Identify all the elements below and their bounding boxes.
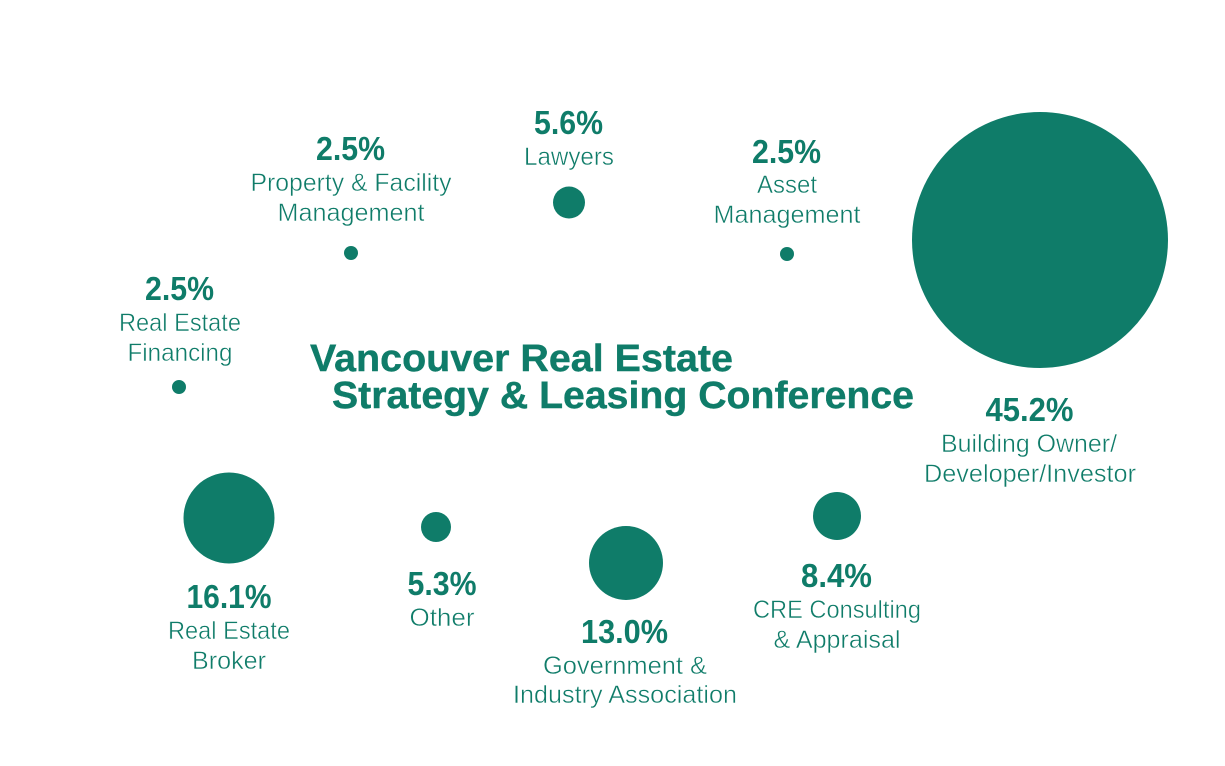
bubble: lawyers: Lawyers (524, 143, 614, 171)
bubble: real estate broker: 16.1% (186, 578, 272, 615)
bubble: cre consulting and appraisal: CRE Consulting (753, 596, 921, 624)
bubble: property and facility management: 2.5% (316, 130, 385, 167)
title: Vancouver Real Estate (310, 338, 733, 380)
bubble: government and industry association (513, 526, 737, 709)
bubble: building owner developer investor (912, 112, 1168, 488)
bubble: property and facility management: Management (278, 199, 425, 227)
bubble: real estate broker: Real Estate (168, 617, 290, 645)
bubble: cre consulting and appraisal (753, 492, 921, 654)
bubble: government and industry association: Government & (543, 652, 707, 680)
bubble: real estate financing: 2.5% (145, 270, 214, 307)
bubble: cre consulting and appraisal: & Appraisal (774, 626, 900, 654)
title (310, 338, 914, 417)
bubble: asset management: Management (714, 201, 861, 229)
bubble: other: Other (410, 604, 474, 632)
bubble: cre consulting and appraisal: 8.4% (801, 557, 872, 594)
bubble: lawyers: 5.6% (534, 104, 603, 141)
bubble: real estate broker: Broker (192, 647, 266, 675)
bubble: asset management: 2.5% (752, 133, 821, 170)
bubble: other: 5.3% (408, 565, 476, 602)
bubble: lawyers (524, 104, 614, 218)
bubble: building owner developer investor: 45.2% (986, 391, 1074, 428)
bubble: government and industry association: Industry Association (513, 681, 737, 709)
bubble: building owner developer investor: Building Owner/ (941, 430, 1117, 458)
bubble: other (408, 512, 476, 632)
bubble: real estate financing: Real Estate (119, 309, 241, 337)
bubble: property and facility management: Property & Facility (250, 169, 452, 197)
title: Strategy & Leasing Conference (332, 375, 914, 417)
bubble: building owner developer investor: Developer/Investor (924, 460, 1136, 488)
bubble: real estate financing: Financing (128, 339, 232, 367)
bubble: real estate financing (119, 270, 241, 394)
bubble: asset management: Asset (757, 171, 817, 199)
bubble: government and industry association: 13.0% (581, 613, 668, 650)
bubble: asset management (714, 133, 861, 261)
bubble: real estate broker (168, 472, 290, 675)
bubble: property and facility management (250, 130, 452, 260)
